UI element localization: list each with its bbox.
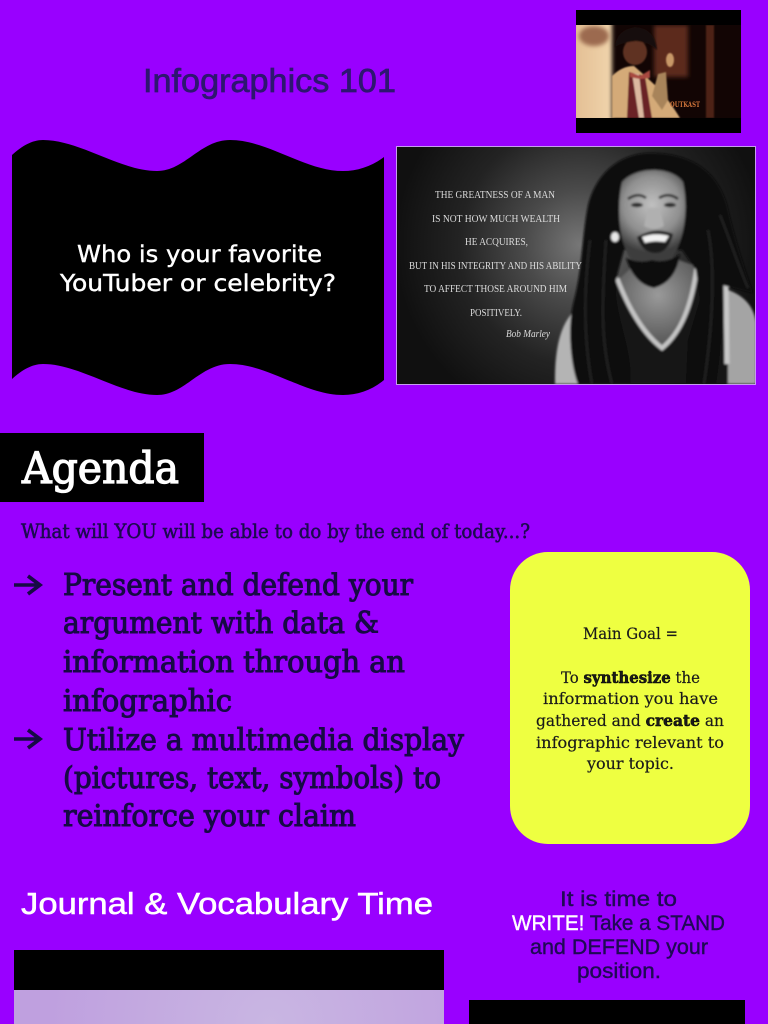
panel: wavy question banner bbox=[12, 140, 384, 395]
bullet list: (pictures, text, symbols) to bbox=[63, 761, 441, 795]
quote text: TO AFFECT THOSE AROUND HIM bbox=[424, 283, 567, 295]
subtitle: What will YOU will be able to do by the end of today...? bbox=[21, 520, 530, 543]
panel: main goal callout bbox=[510, 552, 750, 844]
hair bbox=[570, 153, 753, 384]
question text: YouTuber or celebrity? bbox=[59, 271, 336, 297]
text block: write prompt: It is time to bbox=[560, 888, 677, 911]
panel: main goal callout: infographic relevant to bbox=[536, 733, 724, 752]
bullet list: argument with data & bbox=[63, 606, 379, 640]
heading: Agenda bbox=[0, 433, 204, 502]
bullet list: Utilize a multimedia display bbox=[63, 723, 464, 757]
icon: arrow bullet 2 bbox=[14, 730, 40, 748]
quote text: POSITIVELY. bbox=[470, 307, 522, 319]
bullet list: information through an bbox=[63, 645, 405, 679]
quote text: Bob Marley bbox=[506, 329, 550, 340]
image: Outkast album cover bbox=[572, 10, 741, 133]
bullet list bbox=[14, 568, 464, 833]
image: Bob Marley quote poster bbox=[396, 146, 756, 384]
quote text: IS NOT HOW MUCH WEALTH bbox=[432, 213, 560, 225]
bullet list: reinforce your claim bbox=[63, 799, 356, 833]
heading: journal and vocabulary time: Journal & Vocabulary Time bbox=[21, 886, 433, 921]
image: journal slide bbox=[14, 950, 444, 1024]
panel: main goal callout: information you have bbox=[543, 689, 718, 708]
image: write prompt slide bbox=[469, 1000, 745, 1024]
text block: write prompt: WRITE! Take a STAND bbox=[512, 912, 725, 935]
question text: Who is your favorite bbox=[77, 242, 322, 268]
quote text: HE ACQUIRES, bbox=[465, 236, 528, 248]
panel: main goal callout: To synthesize the bbox=[561, 668, 700, 687]
bullet list: infographic bbox=[63, 684, 232, 718]
panel: main goal callout: your topic. bbox=[586, 754, 674, 773]
panel: main goal callout: gathered and create an bbox=[536, 711, 724, 730]
image: Outkast album cover: OUTKAST bbox=[670, 100, 701, 109]
face bbox=[619, 170, 685, 268]
title: Infographics 101 bbox=[143, 62, 396, 99]
bullet list: Present and defend your bbox=[63, 568, 414, 602]
quote text: BUT IN HIS INTEGRITY AND HIS ABILITY bbox=[409, 260, 582, 272]
quote text: THE GREATNESS OF A MAN bbox=[435, 189, 555, 201]
portrait illustration bbox=[555, 153, 756, 384]
heading: Agenda: Agenda bbox=[21, 444, 179, 494]
text block: write prompt: and DEFEND your bbox=[530, 936, 708, 959]
icon: arrow bullet 1 bbox=[14, 576, 40, 594]
panel: main goal callout: Main Goal = bbox=[583, 624, 678, 643]
text block: write prompt: position. bbox=[577, 960, 661, 983]
question text bbox=[59, 242, 336, 297]
quote text bbox=[409, 189, 582, 340]
text block: write prompt bbox=[512, 888, 725, 983]
